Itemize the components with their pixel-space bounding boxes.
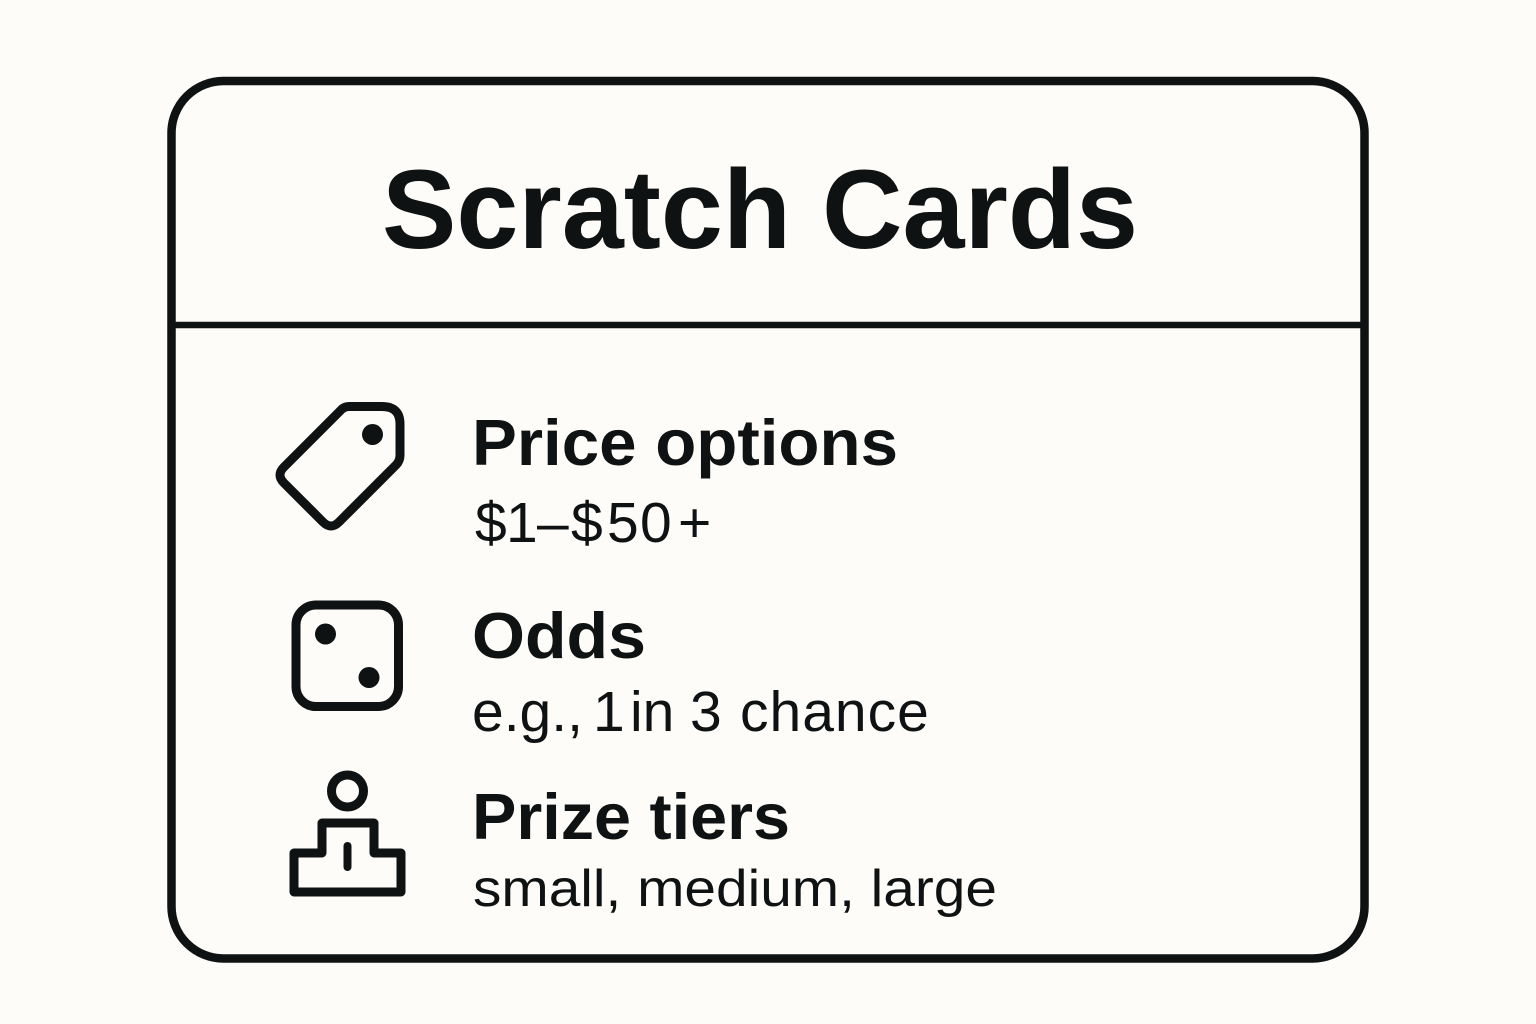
text: odds example: e.g., [472, 680, 583, 744]
panel: scratch cards card [172, 81, 1364, 958]
text: odds example: in [630, 680, 674, 744]
text: odds example: 3 [690, 680, 722, 744]
heading: odds: Odds [472, 599, 646, 672]
text: odds example: 1 [593, 680, 625, 744]
heading: prize tiers: Prize tiers [472, 780, 790, 853]
icon: prize podium [294, 775, 401, 892]
icon: price tag [280, 406, 400, 526]
icon: die [296, 605, 398, 706]
title: Scratch Cards [382, 147, 1138, 272]
text: price range: $1–$50+ [475, 491, 711, 555]
heading: price options: Price options [472, 406, 898, 479]
text: prize sizes: small, medium, large [473, 860, 997, 918]
text: odds example: chance [740, 680, 930, 744]
